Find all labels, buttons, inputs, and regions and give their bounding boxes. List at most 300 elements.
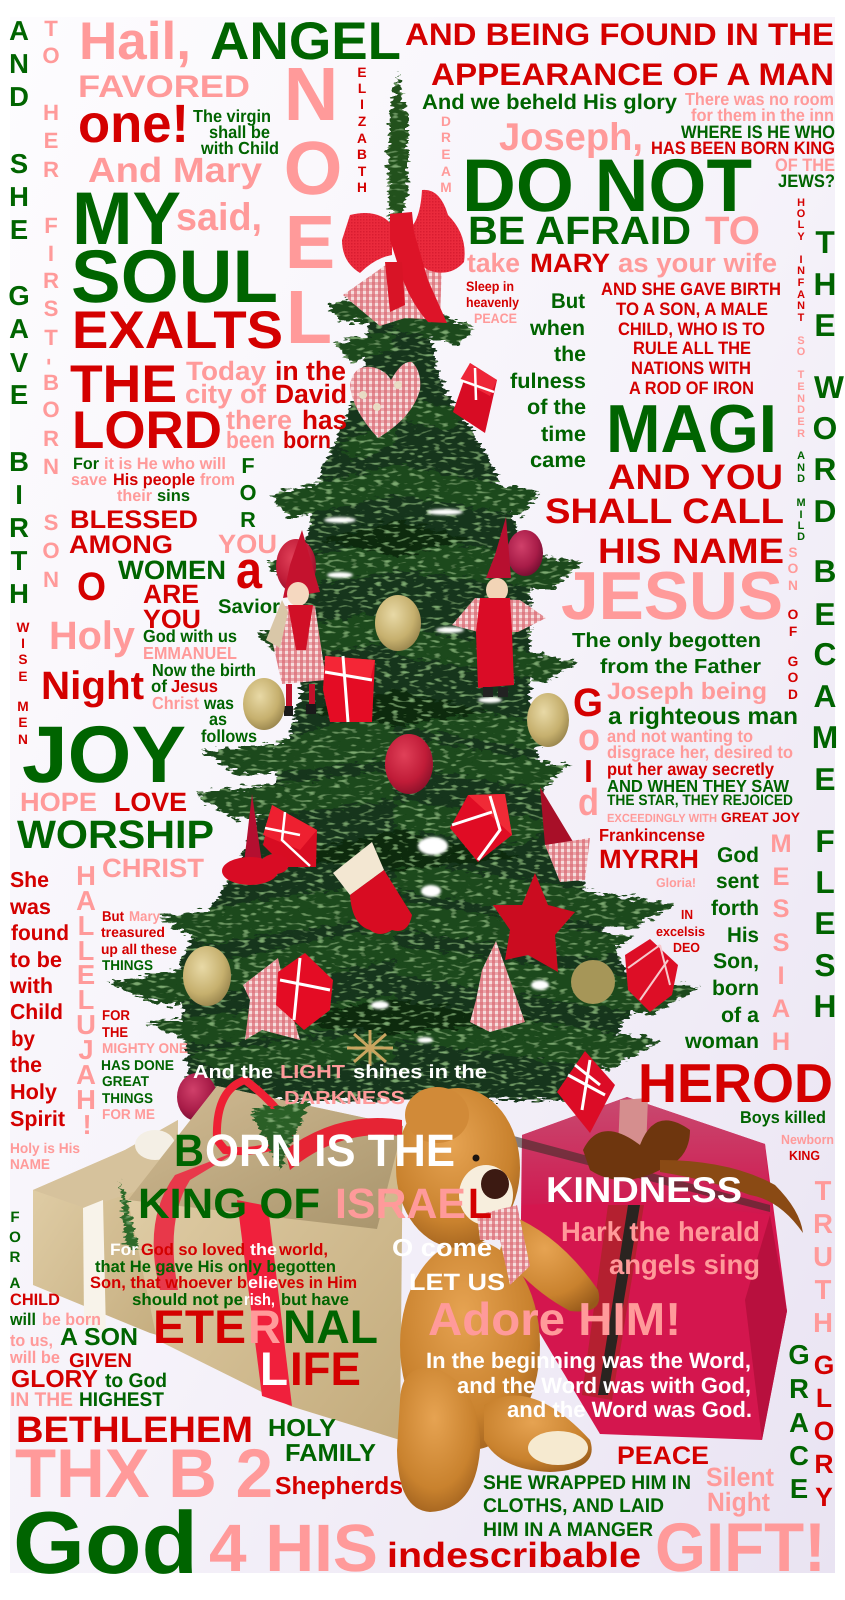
- text: god sent forth his son born of a woman: Son,: [713, 949, 759, 973]
- heading: HEROD: HEROD: [638, 1052, 833, 1114]
- text: she wrapped him in cloths: HIM IN A MANGER: [483, 1519, 653, 1541]
- text: holy family shepherds: HOLY: [268, 1415, 336, 1442]
- text: today in the city of david there has been born: [185, 356, 347, 454]
- text: glory to god in the highest: GLORY: [11, 1366, 98, 1393]
- text: hark the herald angels sing: [561, 1216, 760, 1280]
- text: for a child will be born to us: be born: [42, 1310, 101, 1329]
- text: today in the city of david there has been born: there: [226, 405, 292, 435]
- text: for you a savior: Savior: [218, 596, 280, 618]
- heading: be afraid to: TO: [705, 209, 760, 253]
- text: today in the city of david there has been born: been: [226, 428, 275, 454]
- text: to her firstborn son (vertical): -: [38, 358, 63, 365]
- text: for a child will be born to us: [9, 1209, 138, 1372]
- text: holy is his name: NAME: [10, 1157, 50, 1173]
- heading: EXALTS: EXALTS: [72, 301, 283, 360]
- text: but mary treasured up all these things: But: [102, 909, 124, 925]
- heading: and you shall call his name: HIS NAME: [598, 531, 784, 571]
- ornament: straw star: [347, 1030, 393, 1066]
- text: and the light shines in the darkness: [193, 1062, 487, 1109]
- text: she was found to be with child by the holy spirit: to be: [10, 947, 62, 972]
- text: but when the fulness of the time came: came: [530, 448, 586, 472]
- text: frankincense myrrh gloria: Gloria!: [656, 875, 696, 890]
- heading: and you shall call his name: [545, 457, 784, 571]
- text: holy family shepherds: [268, 1415, 403, 1500]
- text: and she gave birth to a son: AND SHE GAVE BIRTH: [601, 279, 781, 299]
- text: the virgin shall be with child: shall be: [209, 122, 270, 142]
- text: blessed among women are you: ARE: [143, 579, 199, 609]
- text: joseph being a righteous man: and not wanting to: [607, 726, 753, 746]
- text: one!: one!: [78, 94, 189, 154]
- text: for a child will be born to us: GIVEN: [69, 1350, 132, 1372]
- text: o come let us adore him: LET US: [409, 1270, 505, 1296]
- text: and she gave birth to a son: TO A SON, A MALE: [616, 299, 768, 319]
- text: now the birth of jesus christ was as follows: Christ: [152, 693, 199, 713]
- text: there was no room for them in the inn: for them in the inn: [691, 105, 834, 125]
- text: gold (vertical): d: [578, 782, 599, 824]
- text: take mary as your wife: MARY: [530, 248, 610, 278]
- text: for it is he who will save his people from their sins: For: [73, 455, 100, 473]
- text: for the mighty one has done great things for me: GREAT: [102, 1074, 149, 1090]
- text: frankincense myrrh gloria: MYRRH: [599, 844, 699, 874]
- text: joseph being a righteous man: disgrace her, desired to: [607, 742, 793, 762]
- text: hallelujah (vertical): HALLELUJAH!: [76, 860, 96, 1140]
- text: the only begotten from the father: [572, 630, 761, 678]
- heading: THX B 2 God 4 HIS indescribable GIFT!: 4 HIS: [209, 1511, 378, 1586]
- text: sleep in heavenly peace: heavenly: [466, 295, 519, 310]
- text: today in the city of david there has been born: has: [302, 405, 347, 435]
- text: and she gave birth to a son: RULE ALL THE: [633, 338, 751, 358]
- text: and she gave birth (vertical): AND SHE GAVE BIRTH: [8, 15, 30, 609]
- heading: JOY: JOY: [22, 710, 186, 800]
- text: FAVORED: FAVORED: [78, 69, 250, 104]
- heading: born is the king of israel: ISRAE: [335, 1181, 466, 1228]
- heading: THE: THE: [70, 355, 177, 414]
- ornament: red bauble centre: [385, 734, 433, 794]
- text: god with us emmanuel: God with us: [143, 626, 237, 646]
- text: she was found to be with child by the holy spirit: Holy: [10, 1079, 57, 1104]
- photo: branch tips above gold gift: [120, 1100, 310, 1250]
- text: for it is he who will save his people from their sins: it is He who will: [104, 455, 226, 473]
- ornament: red gift above pink box: [557, 1051, 615, 1133]
- text: wise men (vertical): WISE MEN: [17, 620, 30, 747]
- text: hark the herald angels sing: angels sing: [609, 1249, 760, 1280]
- text: boys killed newborn king: Newborn: [781, 1132, 834, 1147]
- text: holy family shepherds: Shepherds: [275, 1473, 403, 1500]
- ornament: gold baubles: [183, 595, 615, 1006]
- heading: KINDNESS: KINDNESS: [546, 1170, 742, 1210]
- text: for it is he who will save his people from their sins: save: [71, 471, 107, 489]
- text: dream (vertical): DREAM: [440, 114, 452, 195]
- text: glory to god in the highest: to God: [105, 1370, 167, 1392]
- text: for god so loved the world: should not pe: [132, 1291, 243, 1309]
- text: today in the city of david there has been born: born: [283, 428, 331, 454]
- text: for the mighty one has done great things for me: THINGS: [102, 1091, 153, 1107]
- text: messiah (vertical): MESSIAH: [770, 830, 792, 1056]
- text: glory to god in the highest: HIGHEST: [79, 1389, 164, 1411]
- text: for the mighty one has done great things for me: THE: [102, 1025, 128, 1041]
- text: in excelsis deo: [656, 907, 705, 955]
- text: now the birth of jesus christ was as follows: of: [151, 676, 167, 696]
- text: for god so loved the world: God so loved: [141, 1241, 245, 1259]
- text: and she gave birth to a son: NATIONS WITH: [631, 358, 751, 378]
- heading: and being found in the appearance of a man: APPEARANCE OF A MAN: [431, 57, 834, 92]
- text: boys killed newborn king: KING: [789, 1148, 820, 1163]
- heading: Hail, ANGEL: Hail,: [79, 12, 191, 71]
- text: and when they saw the star: GREAT JOY: [721, 810, 800, 825]
- text: and the light shines in the darkness: And the: [193, 1062, 273, 1083]
- ornament: elf doll left: [266, 530, 326, 716]
- heading: born is the king of israel: L: [468, 1181, 492, 1228]
- ornament: red fabric star: [493, 873, 575, 972]
- text: for god so loved the world: [90, 1241, 357, 1309]
- ornament: red ribbon bow on treetop: [342, 190, 465, 326]
- ornament: christmas stocking mitten: [333, 842, 412, 934]
- text: god sent forth his son born of a woman: [684, 843, 759, 1053]
- ornament: gingham star and red gift lower left: [243, 953, 333, 1040]
- text: where is he who has been born king of the jews: JEWS?: [778, 171, 835, 191]
- text: to her firstborn son (vertical): TO HER FIRST: [42, 16, 60, 350]
- text: for god so loved the world: For: [110, 1241, 139, 1259]
- text: holy is his name: [10, 1141, 80, 1173]
- text: she was found to be with child by the holy spirit: by: [11, 1026, 35, 1051]
- text: for the mighty one has done great things for me: HAS DONE: [101, 1058, 174, 1074]
- text: for god so loved the world: elie: [248, 1274, 278, 1292]
- text: hark the herald angels sing: Hark the herald: [561, 1216, 760, 1247]
- text: god with us emmanuel: [143, 626, 237, 663]
- text: she was found to be with child by the holy spirit: the: [10, 1052, 42, 1077]
- text: she was found to be with child by the holy spirit: Child: [10, 999, 63, 1024]
- text: for it is he who will save his people from their sins: from: [200, 471, 235, 489]
- text: to her firstborn son (vertical): [38, 16, 63, 592]
- ornament: elf doll right branch: [540, 787, 590, 882]
- text: and she gave birth to a son: CHILD, WHO IS TO: [618, 319, 765, 339]
- text: she wrapped him in cloths: [483, 1472, 691, 1541]
- text: for the mighty one has done great things for me: MIGHTY ONE: [102, 1041, 188, 1057]
- text: grace (vertical): GRACE: [788, 1339, 810, 1504]
- text: for it is he who will save his people from their sins: [71, 455, 235, 505]
- text: today in the city of david there has been born: Today: [186, 356, 266, 386]
- text: god with us emmanuel: EMMANUEL: [143, 643, 237, 663]
- text: for a child will be born to us: will be: [9, 1348, 60, 1367]
- photo: christmas tree: [108, 73, 700, 1100]
- text: now the birth of jesus christ was as follows: Jesus: [171, 676, 218, 696]
- heading: and you shall call his name: AND YOU: [608, 457, 783, 497]
- text: but when the fulness of the time came: the: [554, 342, 586, 366]
- text: today in the city of david there has been born: in the: [275, 356, 346, 386]
- heading: born is the king of israel: KING OF: [138, 1181, 320, 1228]
- ornament: crimson baubles behind dolls: [276, 530, 543, 593]
- text: but when the fulness of the time came: time: [541, 422, 586, 446]
- heading: DO NOT: DO NOT: [462, 143, 752, 227]
- text: Joseph,: Joseph,: [499, 116, 643, 159]
- heading: eternal life: ETE: [153, 1301, 246, 1354]
- text: frankincense myrrh gloria: Frankincense: [599, 825, 705, 845]
- text: and when they saw the star: THE STAR, THEY REJOICED: [607, 792, 793, 809]
- text: son of god (vertical): SON: [788, 545, 799, 593]
- text: blessed among women are you: [69, 506, 226, 634]
- text: but mary treasured up all these things: up all these: [101, 942, 177, 958]
- text: god sent forth his son born of a woman: His: [727, 923, 759, 947]
- heading: eternal life: NAL: [283, 1301, 378, 1354]
- heading: THX B 2 God 4 HIS indescribable GIFT!: [13, 1435, 826, 1592]
- text: but when the fulness of the time came: when: [529, 316, 585, 340]
- text: and she gave birth to a son: [601, 279, 781, 398]
- text: hope love: LOVE: [114, 787, 187, 817]
- text: joseph being a righteous man: Joseph being: [607, 679, 767, 705]
- heading: be afraid to: BE AFRAID: [468, 209, 691, 253]
- text: and we beheld his glory: And we beheld His glory: [422, 90, 677, 114]
- heading: Hail, ANGEL: ANGEL: [210, 12, 401, 71]
- text: holy infant so tender and mild (vertical): AND MILD: [796, 450, 806, 543]
- text: in excelsis deo: excelsis: [656, 924, 705, 939]
- heading: MY: MY: [72, 176, 181, 260]
- text: for you a savior: FOR: [240, 453, 256, 532]
- text: joseph being a righteous man: put her away secretly: [607, 759, 774, 779]
- heading: WORSHIP: WORSHIP: [17, 813, 214, 857]
- text: she was found to be with child by the holy spirit: She: [10, 867, 49, 892]
- text: sleep in heavenly peace: [466, 279, 519, 326]
- text: but when the fulness of the time came: of the: [527, 395, 586, 419]
- heading: born is the king of israel: ORN IS THE: [205, 1125, 455, 1176]
- text: CHRIST: CHRIST: [102, 853, 204, 883]
- text: for god so loved the world: the: [250, 1241, 277, 1259]
- text: for it is he who will save his people from their sins: sins: [157, 487, 190, 505]
- heading: BETHLEHEM: BETHLEHEM: [16, 1409, 253, 1450]
- text: god sent forth his son born of a woman: forth: [711, 896, 759, 920]
- heading: MAGI: MAGI: [606, 391, 777, 467]
- ornament: gingham heart: [350, 362, 420, 438]
- text: the virgin shall be with child: [193, 106, 279, 158]
- text: the virgin shall be with child: with Child: [200, 138, 279, 158]
- text: now the birth of jesus christ was as follows: as: [209, 709, 227, 729]
- text: for god so loved the world: world,: [278, 1241, 328, 1259]
- text: in the beginning was the word: In the beginning was the Word,: [426, 1348, 751, 1373]
- heading: LORD: LORD: [72, 401, 222, 460]
- text: the only begotten from the father: The only begotten: [572, 630, 761, 652]
- text: now the birth of jesus christ was as follows: Now the birth: [152, 660, 256, 680]
- text: for you a savior: YOU: [218, 529, 277, 559]
- text: for a child will be born to us: FOR A: [9, 1209, 21, 1292]
- text: take mary as your wife: as your wife: [618, 248, 777, 278]
- heading: and being found in the appearance of a man: AND BEING FOUND IN THE: [405, 17, 834, 52]
- heading: JESUS: JESUS: [561, 558, 783, 634]
- text: and the light shines in the darkness: shines in the: [353, 1062, 487, 1083]
- text: in the beginning was the word: [426, 1348, 752, 1422]
- text: blessed among women are you: YOU: [143, 604, 201, 634]
- heading: NOEL (vertical): NOEL: [284, 53, 342, 360]
- ornament: red gift right branch: [625, 939, 678, 1012]
- photo: large gold gift with red ribbon: [128, 1080, 403, 1440]
- heading: THX B 2 God 4 HIS indescribable GIFT!: GIFT!: [655, 1509, 826, 1586]
- text: the word became flesh (vertical): THE WORD BECAME FLESH: [812, 224, 844, 1024]
- ornament: elf doll lying left: [222, 794, 289, 885]
- text: for the mighty one has done great things for me: FOR: [102, 1008, 130, 1024]
- text: holy infant so tender and mild (vertical): HOLY INFANT: [797, 197, 806, 324]
- heading: eternal life: R: [248, 1301, 281, 1354]
- text: god sent forth his son born of a woman: born: [712, 976, 759, 1000]
- text: she was found to be with child by the holy spirit: [9, 867, 69, 1131]
- text: said,: said,: [176, 196, 262, 239]
- text: in excelsis deo: DEO: [673, 940, 700, 955]
- text: for god so loved the world: that He gave His only begotten: [95, 1258, 336, 1276]
- photo: teddy bear: [396, 1087, 599, 1512]
- text: for a child will be born to us: A SON: [60, 1324, 138, 1351]
- text: she was found to be with child by the holy spirit: with: [9, 973, 53, 998]
- text: for the mighty one has done great things for me: FOR ME: [102, 1107, 155, 1123]
- text: in excelsis deo: IN: [681, 907, 693, 922]
- text: but mary treasured up all these things: Mary: [129, 909, 160, 925]
- text: to her firstborn son (vertical): BORN SON: [42, 370, 60, 592]
- text: O Holy Night: Holy: [49, 614, 135, 658]
- text: she wrapped him in cloths: CLOTHS, AND LAID: [483, 1495, 664, 1517]
- text: god sent forth his son born of a woman: of a: [721, 1003, 759, 1027]
- text: boys killed newborn king: [740, 1108, 834, 1163]
- text: the virgin shall be with child: The virgin: [193, 106, 271, 126]
- text: but when the fulness of the time came: [510, 289, 586, 472]
- text: for a child will be born to us: will: [9, 1310, 36, 1329]
- text: and the light shines in the darkness: DARKNESS: [284, 1088, 405, 1109]
- text: but when the fulness of the time came: fulness: [510, 369, 586, 393]
- text: now the birth of jesus christ was as follows: was: [203, 693, 234, 713]
- text: hope love: [20, 787, 187, 817]
- text: holy infant so tender and mild (vertical): [796, 197, 806, 543]
- text: hope love: HOPE: [20, 787, 97, 817]
- text: blessed among women are you: WOMEN: [118, 555, 226, 585]
- ornament: red gift centre right: [450, 794, 512, 862]
- heading: and being found in the appearance of a man: [405, 17, 834, 92]
- text: PEACE: PEACE: [617, 1442, 709, 1470]
- text: for god so loved the world: ves in Him: [278, 1274, 357, 1292]
- text: where is he who has been born king of the jews: OF THE: [775, 155, 835, 175]
- text: o come let us adore him: Adore HIM!: [428, 1293, 681, 1345]
- text: for you a savior: [218, 453, 280, 618]
- text: but mary treasured up all these things: THINGS: [102, 958, 153, 974]
- text: o come let us adore him: [392, 1235, 681, 1345]
- heading: born is the king of israel: B: [174, 1125, 204, 1176]
- text: son of god (vertical): OF GOD: [788, 607, 799, 702]
- text: but when the fulness of the time came: But: [551, 289, 585, 313]
- text: Elizabeth (vertical): ELIZABTH: [357, 65, 367, 195]
- text: sleep in heavenly peace: PEACE: [474, 311, 517, 326]
- text: and the light shines in the darkness: LIGHT: [280, 1062, 346, 1083]
- heading: born is the king of israel: [138, 1125, 492, 1228]
- heading: and you shall call his name: SHALL CALL: [545, 491, 784, 531]
- text: gold (vertical): o: [578, 717, 600, 759]
- text: holy is his name: Holy is His: [10, 1141, 80, 1157]
- ornament: red gift mid tree: [323, 656, 375, 722]
- text: holy infant so tender and mild (vertical): SO TENDER: [797, 335, 806, 440]
- text: and when they saw the star: [607, 776, 800, 825]
- text: for god so loved the world: rish,: [244, 1291, 275, 1309]
- text: now the birth of jesus christ was as follows: [151, 660, 257, 746]
- text: silent night: Silent: [706, 1462, 774, 1492]
- text: glory (vertical): GLORY: [814, 1350, 834, 1512]
- text: O Holy Night: [41, 565, 144, 708]
- text: and when they saw the star: AND WHEN THEY SAW: [607, 776, 789, 796]
- text: there was no room for them in the inn: There was no room: [685, 89, 834, 109]
- text: for a child will be born to us: CHILD: [10, 1291, 60, 1309]
- ornament: red gift lower left: [263, 805, 317, 867]
- text: take mary as your wife: take: [467, 248, 520, 278]
- text: gold (vertical): l: [584, 756, 593, 789]
- text: blessed among women are you: BLESSED: [70, 506, 198, 534]
- text: she was found to be with child by the holy spirit: found: [11, 920, 69, 945]
- text: for a child will be born to us: to us,: [10, 1331, 53, 1350]
- text: joseph being a righteous man: [607, 679, 798, 779]
- text: truth (vertical): TRUTH: [813, 1175, 833, 1338]
- text: for it is he who will save his people from their sins: their: [117, 487, 153, 505]
- text: she was found to be with child by the holy spirit: Spirit: [10, 1106, 65, 1131]
- text: god sent forth his son born of a woman: God: [717, 843, 759, 867]
- ornament: hanging red gift top right: [453, 363, 497, 433]
- heading: eternal life: IFE: [290, 1343, 361, 1396]
- text: O Holy Night: O: [77, 565, 106, 609]
- heading: THX B 2 God 4 HIS indescribable GIFT!: indescribable: [387, 1536, 641, 1575]
- text: today in the city of david there has been born: David: [275, 379, 347, 409]
- text: the only begotten from the father: from the Father: [600, 656, 761, 678]
- text: joseph being a righteous man: a righteous man: [608, 704, 798, 730]
- text: silent night: Night: [707, 1487, 770, 1517]
- text: sleep in heavenly peace: Sleep in: [466, 279, 514, 294]
- text: frankincense myrrh gloria: [599, 825, 705, 890]
- text: son of god (vertical): [788, 545, 799, 702]
- text: gold (vertical): G: [573, 681, 603, 725]
- text: And Mary: And Mary: [88, 151, 263, 190]
- text: there was no room for them in the inn: [685, 89, 834, 125]
- text: today in the city of david there has been born: city of: [185, 379, 266, 409]
- text: for god so loved the world: Son, that whoever b: [90, 1274, 247, 1292]
- photo: large pink gift with ribbon: [510, 1097, 803, 1440]
- text: take mary as your wife: [467, 248, 777, 278]
- text: glory to god in the highest: IN THE: [10, 1389, 73, 1411]
- text: where is he who has been born king of the jews: WHERE IS HE WHO: [681, 122, 835, 142]
- text: for you a savior: a: [236, 541, 262, 600]
- heading: eternal life: [153, 1301, 378, 1396]
- text: but mary treasured up all these things: [101, 909, 177, 974]
- text: she was found to be with child by the holy spirit: was: [9, 894, 51, 919]
- text: where is he who has been born king of the jews: [651, 122, 835, 191]
- heading: THX B 2 God 4 HIS indescribable GIFT!: THX B 2: [15, 1435, 273, 1512]
- text: god sent forth his son born of a woman: sent: [716, 869, 759, 893]
- ornament: elf doll right: [452, 517, 546, 697]
- heading: SOUL: SOUL: [71, 234, 278, 318]
- text: and when they saw the star: EXCEEDINGLY WITH: [607, 811, 717, 825]
- text: she wrapped him in cloths: SHE WRAPPED HIM IN: [483, 1472, 691, 1494]
- ornament: crimson bauble on gift: [177, 1073, 217, 1121]
- text: gold (vertical): [573, 681, 603, 824]
- photo: small gold gift left: [33, 1120, 178, 1340]
- text: O Holy Night: Night: [41, 664, 144, 708]
- text: silent night: [706, 1462, 774, 1517]
- heading: THX B 2 God 4 HIS indescribable GIFT!: God: [13, 1493, 198, 1592]
- text: in the beginning was the word: and the Word was with God,: [457, 1373, 751, 1398]
- text: boys killed newborn king: Boys killed: [740, 1108, 826, 1127]
- text: god sent forth his son born of a woman: woman: [684, 1029, 759, 1053]
- text: in the beginning was the word: and the Word was God.: [507, 1397, 752, 1422]
- text: and she gave birth to a son: A ROD OF IRON: [629, 378, 754, 398]
- text: for the mighty one has done great things for me: [101, 1008, 188, 1123]
- text: now the birth of jesus christ was as follows: follows: [201, 726, 257, 746]
- text: for it is he who will save his people from their sins: His people: [113, 471, 195, 489]
- text: but mary treasured up all these things: treasured: [101, 925, 165, 941]
- text: glory to god in the highest: [10, 1366, 167, 1411]
- text: for god so loved the world: but have: [281, 1291, 349, 1309]
- ornament: gingham tree: [470, 941, 525, 1032]
- heading: Hail, ANGEL: [79, 12, 401, 71]
- text: o come let us adore him: O come: [392, 1235, 492, 1262]
- text: blessed among women are you: AMONG: [69, 531, 173, 559]
- heading: eternal life: L: [260, 1343, 288, 1396]
